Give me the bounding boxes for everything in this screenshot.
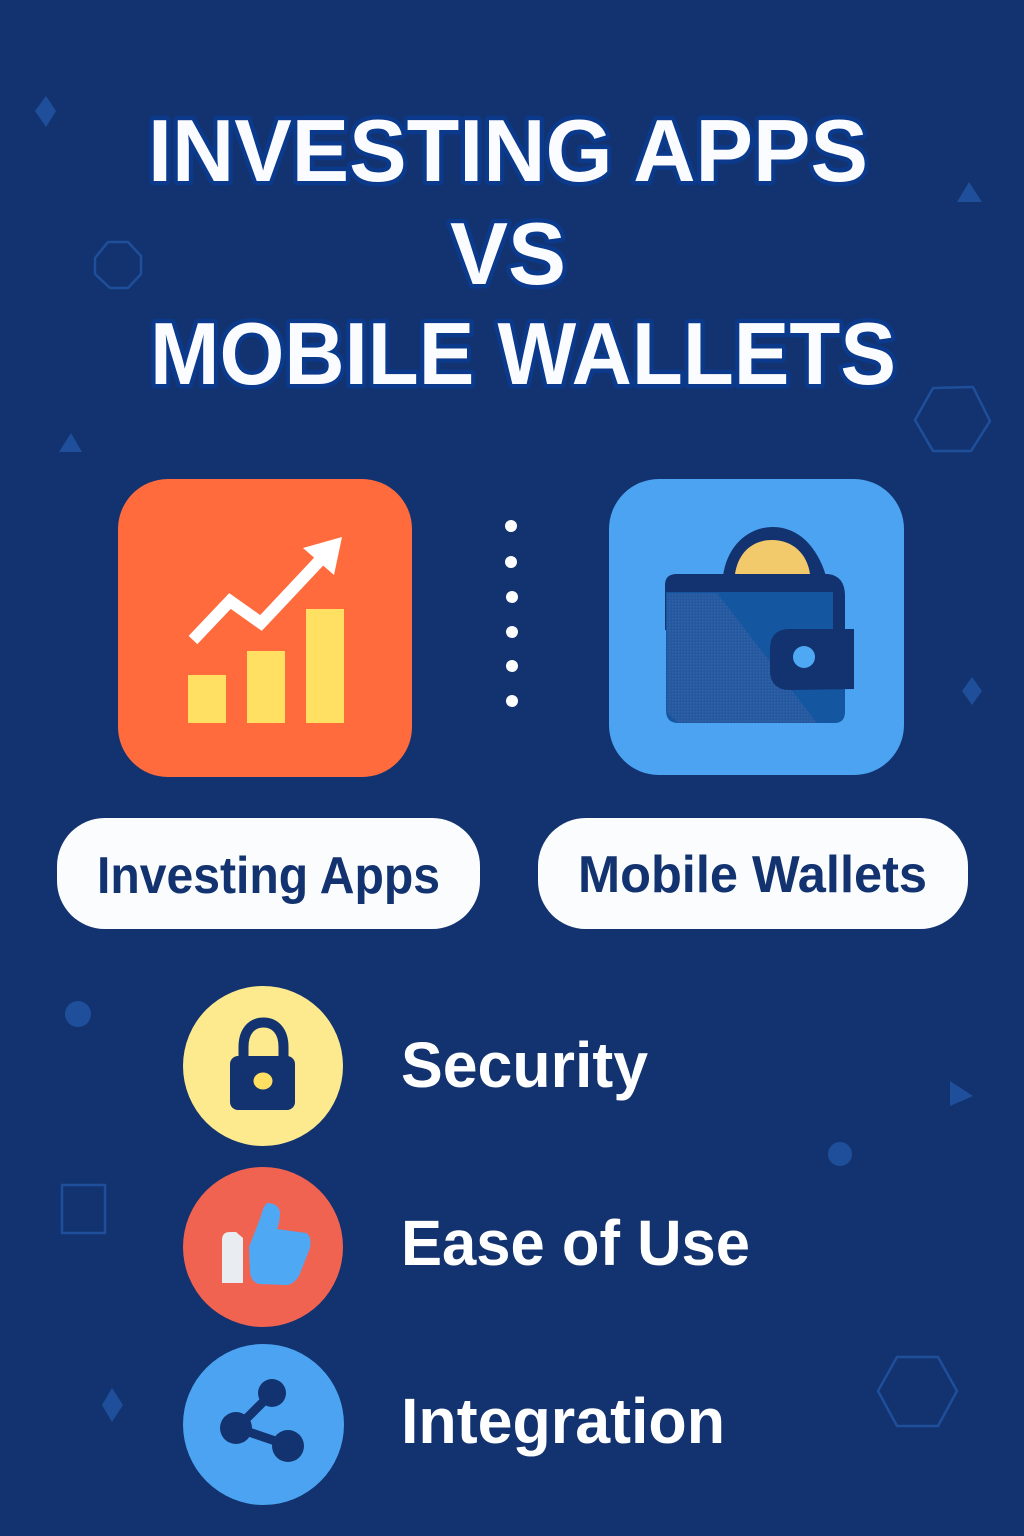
pill: investing apps xyxy=(57,818,480,929)
panel: mobile wallets icon xyxy=(609,479,904,775)
separator dots xyxy=(505,520,518,707)
icon: bar chart xyxy=(188,609,344,723)
title: MOBILE WALLETS xyxy=(150,304,896,403)
title: INVESTING APPS xyxy=(148,101,868,200)
pill: mobile wallets xyxy=(538,818,968,929)
row: ease of use: Ease of Use xyxy=(401,1207,750,1279)
title: VS xyxy=(450,204,566,303)
title xyxy=(148,101,896,403)
icon: rising arrow xyxy=(193,537,342,640)
row: ease of use xyxy=(183,1167,750,1327)
pill: mobile wallets: Mobile Wallets xyxy=(578,846,927,904)
row: integration xyxy=(183,1344,725,1505)
row: integration: Integration xyxy=(401,1385,725,1457)
icon: wallet xyxy=(665,527,854,723)
icon: padlock xyxy=(230,1022,295,1110)
pill: investing apps: Investing Apps xyxy=(97,847,440,905)
icon: thumbs up xyxy=(222,1203,310,1285)
row: security: Security xyxy=(401,1029,648,1101)
icon: share nodes xyxy=(220,1379,304,1462)
row: security xyxy=(183,986,648,1146)
panel: investing apps icon xyxy=(118,479,412,777)
